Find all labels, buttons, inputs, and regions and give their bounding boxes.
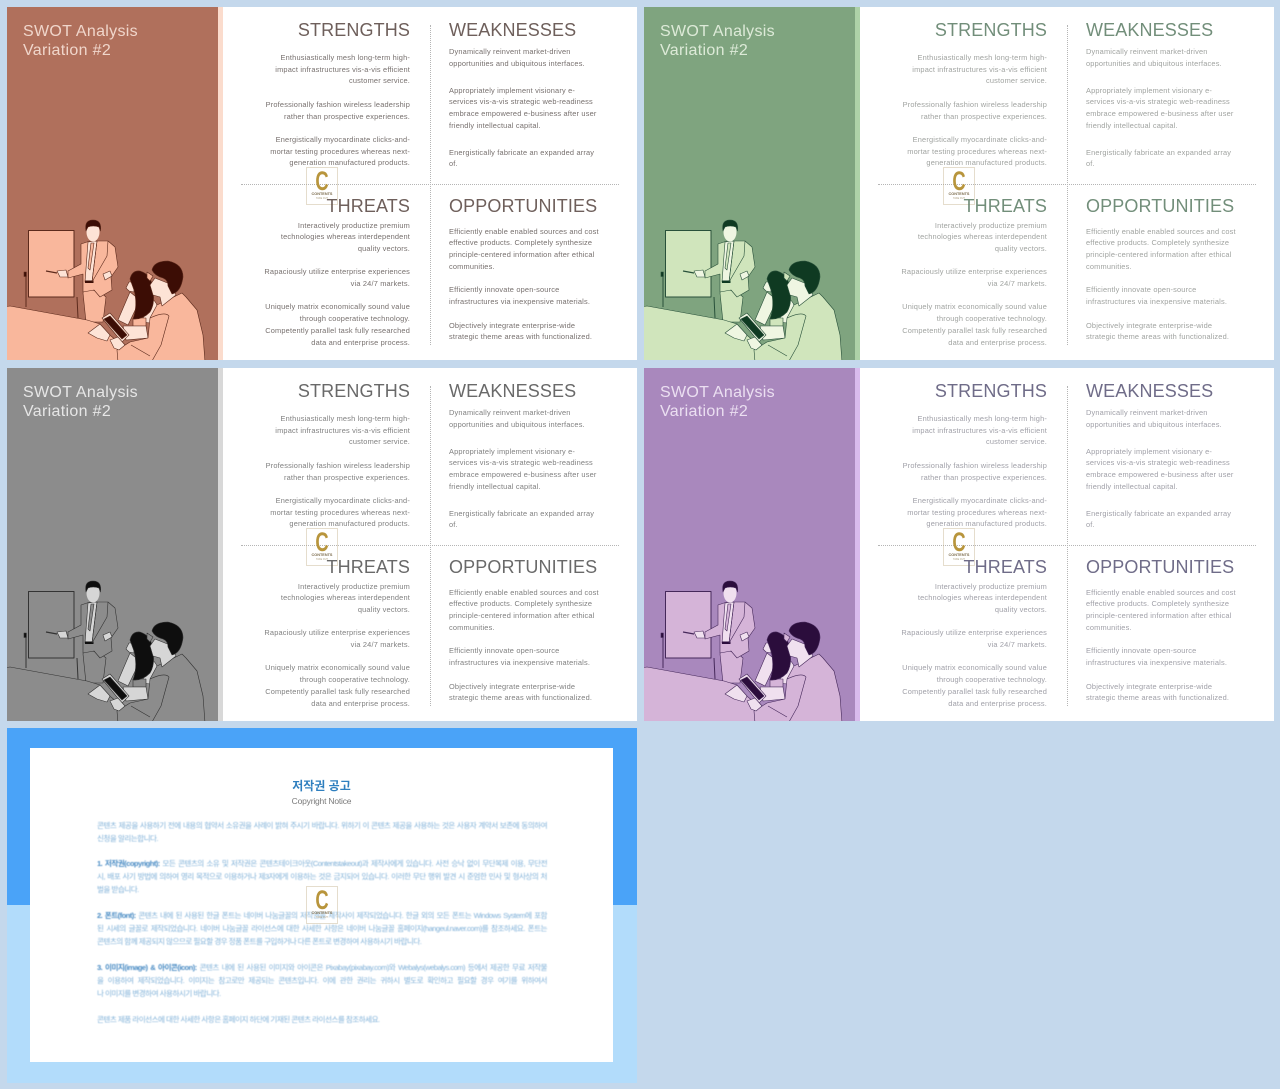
text: weaknesses: embrace empowered e-business after user	[449, 109, 597, 118]
watermark logo	[306, 528, 338, 566]
accent strip	[218, 368, 222, 721]
text: image clause line 3: 나 이미지를 변경하여 사용하시기 바랍니다.	[97, 989, 221, 998]
watermark logo: TAKE OUT	[953, 558, 965, 561]
text: opportunities: communities.	[1086, 262, 1132, 271]
heading: opportunities: OPPORTUNITIES	[1086, 196, 1234, 216]
text: threats: quality vectors.	[358, 605, 410, 614]
text: weaknesses: opportunities and ubiquitous interfaces.	[1086, 420, 1222, 429]
text: weaknesses: Dynamically reinvent market-driven	[1086, 47, 1208, 56]
text: strengths: Professionally fashion wireless leadership	[903, 461, 1047, 470]
title: SWOT Analysis	[660, 384, 775, 401]
text: image clause line 1: 3. 이미지(image) & 아이콘(icon): 콘텐츠 내에 된 사용된 이미지와 아이콘은 Pixabay(pixabay.com)와 Webalys(webalys.com) 등에서 제공한 무료 저작물	[97, 963, 547, 972]
text: opportunities: Efficiently enable enabled sources and cost	[1086, 226, 1236, 236]
text: weaknesses: Dynamically reinvent market-driven	[1086, 408, 1208, 417]
watermark logo: CONTENTS	[312, 552, 332, 556]
text: weaknesses: embrace empowered e-business after user	[449, 470, 597, 479]
slide: gray SWOT	[7, 368, 637, 721]
text: threats: Competently parallel task fully researched	[265, 687, 410, 696]
text: opportunities: strategic theme areas with functionalized.	[1086, 332, 1229, 341]
text: threats: Interactively productize premium	[298, 220, 410, 230]
heading: weaknesses: WEAKNESSES	[449, 20, 576, 40]
text: opportunities: communities.	[449, 623, 495, 632]
text: threats: via 24/7 markets.	[988, 640, 1047, 649]
text: opportunities: principle-centered information after ethical	[449, 611, 595, 620]
text: threats: Competently parallel task fully researched	[902, 687, 1047, 696]
text: weaknesses: embrace empowered e-business after user	[1086, 470, 1234, 479]
text: strengths: rather than prospective experiences.	[284, 112, 410, 121]
text: opportunities: Objectively integrate enterprise-wide	[449, 682, 575, 691]
text: strengths: mortar testing procedures whereas next-	[907, 508, 1047, 517]
text: weaknesses: of.	[449, 520, 458, 529]
text: font clause line 3: 콘텐츠의 함께 제공되지 않으므로 필요할 경우 정품 폰트를 구입하거나 다른 폰트로 변경하여 사용하시기 바랍니다.	[97, 937, 421, 946]
panel: brown illustration panel	[7, 7, 218, 360]
text: weaknesses: services vis-a-vis strategic web-readiness	[449, 458, 593, 467]
heading: threats: THREATS	[963, 196, 1047, 216]
subheading: Copyright Notice: Copyright Notice	[292, 796, 351, 806]
heading: opportunities: OPPORTUNITIES	[449, 557, 597, 577]
heading: weaknesses: WEAKNESSES	[449, 381, 576, 401]
text: threats: technologies whereas interdependent	[918, 593, 1047, 602]
text: strengths	[266, 53, 410, 167]
text: opportunities: infrastructures via inexpensive materials.	[1086, 658, 1227, 667]
panel: purple illustration panel	[644, 368, 854, 721]
text: strengths: mortar testing procedures whereas next-	[270, 147, 410, 156]
text: opportunities: effective products. Completely synthesize	[449, 599, 592, 608]
band: light blue lower background	[7, 905, 637, 1083]
text: strengths: impact infrastructures vis-a-vis efficient	[275, 426, 410, 435]
text: weaknesses	[449, 47, 597, 168]
text: threats: through cooperative technology.	[300, 314, 410, 323]
heading: weaknesses: WEAKNESSES	[1086, 381, 1213, 401]
watermark logo: CONTENTS	[949, 552, 969, 556]
heading: strengths: STRENGTHS	[298, 381, 410, 401]
text: opportunities	[449, 226, 599, 341]
watermark logo: TAKE OUT	[316, 197, 328, 200]
title	[23, 384, 138, 420]
illustration: presenter and audience	[7, 220, 206, 360]
text: opportunities: infrastructures via inexpensive materials.	[449, 297, 590, 306]
title	[660, 23, 775, 59]
title: Variation #2	[660, 403, 748, 420]
text: strengths: Enthusiastically mesh long-term high-	[281, 53, 410, 62]
panel: gray illustration panel	[7, 368, 218, 721]
text: strengths: mortar testing procedures whereas next-	[270, 508, 410, 517]
text: strengths: impact infrastructures vis-a-vis efficient	[912, 65, 1047, 74]
text: strengths	[903, 414, 1047, 528]
text: weaknesses	[1086, 47, 1234, 168]
text: strengths: rather than prospective experiences.	[284, 473, 410, 482]
slide: brown SWOT	[7, 7, 637, 360]
text: opportunities: strategic theme areas with functionalized.	[449, 693, 592, 702]
text: strengths: generation manufactured products.	[926, 158, 1047, 167]
text: strengths: Professionally fashion wireless leadership	[266, 100, 410, 109]
text: weaknesses: Dynamically reinvent market-driven	[449, 408, 571, 417]
panel: green illustration panel	[644, 7, 854, 360]
title: Variation #2	[660, 42, 748, 59]
text: threats: quality vectors.	[358, 244, 410, 253]
text: opportunities: communities.	[1086, 623, 1132, 632]
text: threats: Rapaciously utilize enterprise experiences	[264, 628, 410, 637]
text: threats: Competently parallel task fully researched	[902, 326, 1047, 335]
slide: purple SWOT	[644, 368, 1274, 721]
text: strengths: impact infrastructures vis-a-vis efficient	[275, 65, 410, 74]
text: weaknesses: services vis-a-vis strategic web-readiness	[1086, 97, 1230, 106]
text: closing line: 콘텐츠 제품 라이선스에 대한 사세한 사항은 홈페이지 하단에 기재된 콘텐츠 라이선스를 참조하세요.	[97, 1015, 380, 1024]
text: weaknesses: Appropriately implement visionary e-	[449, 447, 575, 456]
text: strengths: Enthusiastically mesh long-term high-	[281, 414, 410, 423]
heading: weaknesses: WEAKNESSES	[1086, 20, 1213, 40]
text: threats: via 24/7 markets.	[351, 640, 410, 649]
text: weaknesses: Energistically fabricate an expanded array	[1086, 148, 1231, 157]
text: intro line 1: 콘텐츠 제공을 사용하기 전에 내용의 협약서 소유권을 사례이 밝혀 주시기 바랍니다. 위하기 이 콘텐츠 제공을 사용하는 것은 사용자 계약서 보존에 동의하여	[97, 821, 547, 830]
watermark logo: TAKE OUT	[953, 197, 965, 200]
text: opportunities: infrastructures via inexpensive materials.	[1086, 297, 1227, 306]
text: weaknesses: Dynamically reinvent market-driven	[449, 47, 571, 56]
accent strip	[218, 7, 222, 360]
text: strengths	[266, 414, 410, 528]
text: threats: Rapaciously utilize enterprise experiences	[264, 267, 410, 276]
text: threats	[264, 220, 410, 347]
text: weaknesses	[1086, 408, 1234, 529]
heading: strengths: STRENGTHS	[935, 381, 1047, 401]
text: strengths: generation manufactured products.	[926, 519, 1047, 528]
text: weaknesses: opportunities and ubiquitous interfaces.	[1086, 59, 1222, 68]
watermark logo	[943, 528, 975, 566]
text: opportunities: strategic theme areas with functionalized.	[1086, 693, 1229, 702]
text: strengths: customer service.	[349, 76, 410, 85]
text: strengths: Energistically myocardinate clicks-and-	[276, 496, 410, 505]
watermark logo: CONTENTS	[949, 192, 969, 196]
text: opportunities	[1086, 588, 1236, 702]
text: weaknesses: Energistically fabricate an expanded array	[449, 509, 594, 518]
text: opportunities	[449, 588, 599, 702]
title: SWOT Analysis	[660, 23, 775, 40]
text: threats: Interactively productize premium	[298, 582, 410, 590]
text: strengths: Enthusiastically mesh long-term high-	[918, 53, 1047, 62]
text: threats: quality vectors.	[995, 605, 1047, 614]
text: opportunities: Objectively integrate enterprise-wide	[1086, 682, 1212, 691]
title: SWOT Analysis	[23, 384, 138, 401]
heading: opportunities: OPPORTUNITIES	[449, 196, 597, 216]
text: weaknesses: services vis-a-vis strategic web-readiness	[1086, 458, 1230, 467]
text: threats	[264, 582, 410, 708]
text: weaknesses: Energistically fabricate an expanded array	[449, 148, 594, 157]
text: opportunities: Efficiently innovate open-source	[449, 285, 559, 294]
text: image clause line 2: 을 이용하여 제작되었습니다. 이미지는 참고로만 제공되는 콘텐츠입니다. 이에 관한 권리는 귀하시 별도로 확인하고 필요할 경우 여기를 위하여서	[97, 976, 547, 985]
text: strengths: Energistically myocardinate clicks-and-	[913, 496, 1047, 505]
text: weaknesses: friendly intellectual capital.	[449, 121, 541, 130]
text: weaknesses: Appropriately implement visionary e-	[449, 86, 575, 95]
text: intro line 2: 신청을 알리는합니다.	[97, 834, 158, 843]
text: opportunities: communities.	[449, 262, 495, 271]
text: threats: technologies whereas interdependent	[918, 232, 1047, 241]
text: opportunities: principle-centered information after ethical	[1086, 611, 1232, 620]
watermark logo	[943, 167, 975, 205]
heading: strengths: STRENGTHS	[298, 20, 410, 40]
text: opportunities: Objectively integrate enterprise-wide	[449, 321, 575, 330]
text: weaknesses: friendly intellectual capital.	[1086, 482, 1178, 491]
text: opportunities: Efficiently innovate open-source	[1086, 646, 1196, 655]
text: strengths	[903, 53, 1047, 167]
text: opportunities: Efficiently innovate open-source	[449, 646, 559, 655]
text: weaknesses: Appropriately implement visionary e-	[1086, 447, 1212, 456]
text: threats: Uniquely matrix economically sound value	[902, 302, 1047, 311]
illustration: presenter and audience	[644, 220, 842, 360]
text: weaknesses: Appropriately implement visionary e-	[1086, 86, 1212, 95]
text: copyright clause line 3: 벌을 받습니다.	[97, 885, 139, 894]
text: threats: through cooperative technology.	[937, 314, 1047, 323]
text: strengths: Energistically myocardinate clicks-and-	[276, 135, 410, 144]
text: strengths: customer service.	[986, 437, 1047, 446]
watermark logo: CONTENTS	[312, 192, 332, 196]
illustration: presenter and audience	[644, 580, 842, 721]
text: font clause line 2: 된 시세의 글꼴로 제작되었습니다. 네이버 나눔글꼴 라이선스에 대한 사세한 사항은 네이버 나눔글꼴 홈페이지(hangeul.naver.com)를 참조하세요. 폰트는	[97, 924, 547, 933]
heading: Korean title: 저작권 공고	[292, 779, 351, 793]
title	[660, 384, 775, 420]
text: opportunities: Objectively integrate enterprise-wide	[1086, 321, 1212, 330]
text: opportunities: Efficiently innovate open-source	[1086, 285, 1196, 294]
text: threats: Rapaciously utilize enterprise experiences	[901, 628, 1047, 637]
text: opportunities: effective products. Completely synthesize	[449, 238, 592, 247]
text: threats	[901, 582, 1047, 708]
title: Variation #2	[23, 42, 111, 59]
text: threats: through cooperative technology.	[300, 675, 410, 684]
text: threats: Competently parallel task fully researched	[265, 326, 410, 335]
text: strengths: customer service.	[986, 76, 1047, 85]
text: threats: data and enterprise process.	[948, 338, 1047, 347]
text: weaknesses: of.	[1086, 159, 1095, 168]
watermark logo: TAKE OUT	[316, 558, 328, 561]
text: threats: data and enterprise process.	[948, 699, 1047, 708]
text: weaknesses: of.	[449, 159, 458, 168]
text: strengths: generation manufactured products.	[289, 158, 410, 167]
title	[23, 23, 138, 59]
slide: green SWOT	[644, 7, 1274, 360]
text: threats: via 24/7 markets.	[351, 279, 410, 288]
text: weaknesses: Energistically fabricate an expanded array	[1086, 509, 1231, 518]
text: opportunities: strategic theme areas with functionalized.	[449, 332, 592, 341]
text: strengths: Energistically myocardinate clicks-and-	[913, 135, 1047, 144]
text: threats: Uniquely matrix economically sound value	[265, 302, 410, 311]
panel: white notice card	[30, 748, 613, 1062]
text: weaknesses: opportunities and ubiquitous interfaces.	[449, 59, 585, 68]
text: threats: technologies whereas interdependent	[281, 232, 410, 241]
text: weaknesses: friendly intellectual capital.	[449, 482, 541, 491]
text: copyright clause line 1: 1. 저작권(copyright): 모든 콘텐츠의 소유 및 저작권은 콘텐츠테이크아웃(Contentstakeout)과 제작사에게 있습니다. 사전 승낙 없이 무단복제 이용, 무단전	[97, 859, 547, 868]
text: copyright clause line 2: 시, 배포 사기 방법에 의하여 영리 목적으로 이용하거나 제3자에게 이용하는 것은 금지되어 있습니다. 이러한 무단 행위 발견 시 준엄한 민사 및 형사상의 처	[97, 872, 547, 881]
text: opportunities: infrastructures via inexpensive materials.	[449, 658, 590, 667]
text: strengths: impact infrastructures vis-a-vis efficient	[912, 426, 1047, 435]
text: strengths: generation manufactured products.	[289, 519, 410, 528]
text: strengths: rather than prospective experiences.	[921, 112, 1047, 121]
text: strengths: rather than prospective experiences.	[921, 473, 1047, 482]
text: weaknesses	[449, 408, 597, 529]
accent strip	[854, 7, 860, 360]
text: opportunities: principle-centered information after ethical	[1086, 250, 1232, 259]
watermark logo: CONTENTS	[312, 910, 332, 914]
accent strip	[854, 368, 860, 721]
text: weaknesses: embrace empowered e-business after user	[1086, 109, 1234, 118]
text: opportunities: Efficiently enable enabled sources and cost	[449, 588, 599, 596]
text: threats: quality vectors.	[995, 244, 1047, 253]
watermark logo: TAKE OUT	[316, 916, 328, 919]
text: threats: Interactively productize premium	[935, 582, 1047, 590]
title: SWOT Analysis	[23, 23, 138, 40]
text: opportunities: principle-centered information after ethical	[449, 250, 595, 259]
heading: threats: THREATS	[963, 557, 1047, 577]
text: threats	[901, 220, 1047, 347]
text: threats: data and enterprise process.	[311, 338, 410, 347]
text: strengths: mortar testing procedures whereas next-	[907, 147, 1047, 156]
heading: threats: THREATS	[326, 196, 410, 216]
text: threats: Interactively productize premium	[935, 220, 1047, 230]
text: strengths: Professionally fashion wireless leadership	[903, 100, 1047, 109]
watermark logo	[306, 886, 338, 924]
text: opportunities	[1086, 226, 1236, 341]
text: strengths: Enthusiastically mesh long-term high-	[918, 414, 1047, 423]
text: strengths: customer service.	[349, 437, 410, 446]
watermark logo	[306, 167, 338, 205]
title: Variation #2	[23, 403, 111, 420]
illustration: presenter and audience	[7, 580, 206, 721]
text: weaknesses: opportunities and ubiquitous interfaces.	[449, 420, 585, 429]
text: weaknesses: friendly intellectual capital.	[1086, 121, 1178, 130]
text: opportunities: Efficiently enable enabled sources and cost	[1086, 588, 1236, 596]
text: opportunities: Efficiently enable enabled sources and cost	[449, 226, 599, 236]
text: threats: Rapaciously utilize enterprise experiences	[901, 267, 1047, 276]
text: threats: Uniquely matrix economically sound value	[902, 663, 1047, 672]
text: threats: Uniquely matrix economically sound value	[265, 663, 410, 672]
text: threats: data and enterprise process.	[311, 699, 410, 708]
heading: strengths: STRENGTHS	[935, 20, 1047, 40]
text: weaknesses: of.	[1086, 520, 1095, 529]
text: threats: technologies whereas interdependent	[281, 593, 410, 602]
text: opportunities: effective products. Completely synthesize	[1086, 599, 1229, 608]
text: threats: via 24/7 markets.	[988, 279, 1047, 288]
band: blue upper background	[7, 728, 637, 905]
text: threats: through cooperative technology.	[937, 675, 1047, 684]
text: weaknesses: services vis-a-vis strategic web-readiness	[449, 97, 593, 106]
text: opportunities: effective products. Completely synthesize	[1086, 238, 1229, 247]
heading: opportunities: OPPORTUNITIES	[1086, 557, 1234, 577]
text: font clause line 1: 2. 폰트(font): 콘텐츠 내에 된 사용된 한글 폰트는 네이버 나눔글꼴의 저작권을 제작사이 제작되었습니다. 한글 외의 모든 폰트는 Windows System에 포함	[97, 911, 547, 920]
text: strengths: Professionally fashion wireless leadership	[266, 461, 410, 470]
heading: threats: THREATS	[326, 557, 410, 577]
